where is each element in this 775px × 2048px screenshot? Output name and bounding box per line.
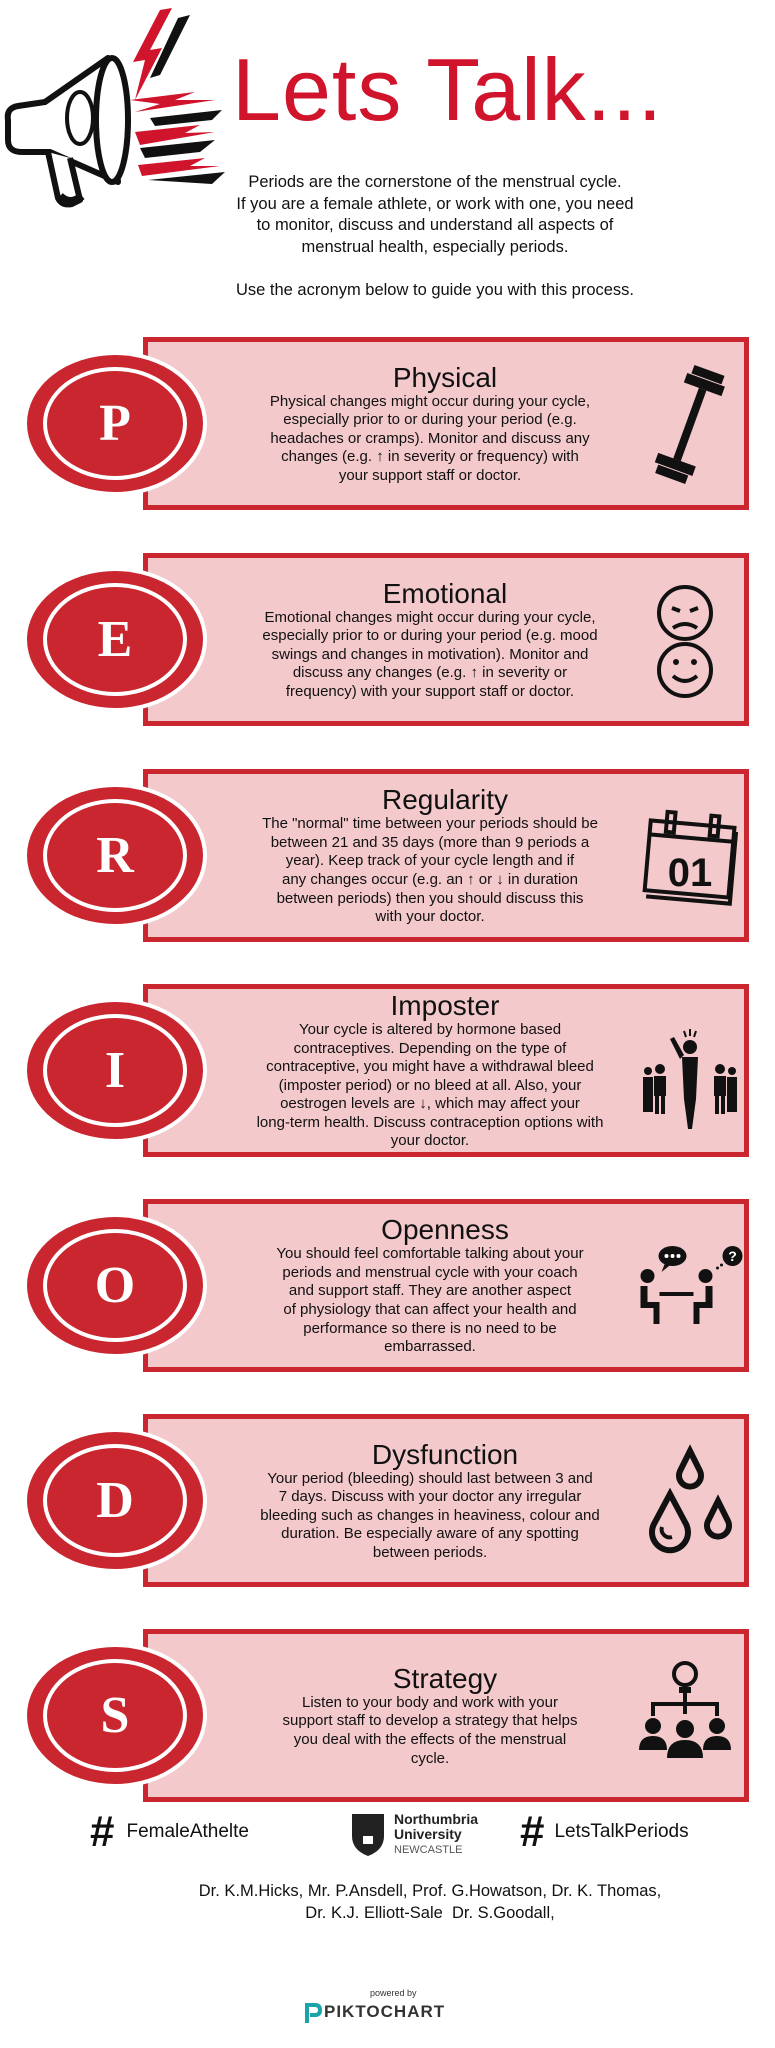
intro text: If you are a female athlete, or work with one, you need	[236, 194, 634, 212]
text: physical: especially prior to or during your period (e.g.	[283, 411, 577, 428]
text: physical: your support staff or doctor.	[339, 467, 521, 484]
text: strategy	[283, 1663, 577, 1767]
circle: E: E	[98, 611, 132, 668]
text: dysfunction	[260, 1439, 600, 1561]
intro text: Use the acronym below to guide you with this process.	[236, 280, 634, 298]
panel: Dysfunction	[27, 1414, 749, 1587]
text: openness: and support staff. They are another aspect	[289, 1282, 571, 1299]
text: openness: periods and menstrual cycle with your coach	[282, 1264, 578, 1281]
icon: megaphone	[4, 8, 225, 208]
logo: Northumbria University: Northumbria	[394, 1811, 478, 1827]
text: physical: changes (e.g. ↑ in severity or frequency) with	[281, 448, 579, 465]
text: dysfunction: between periods.	[373, 1544, 487, 1561]
text: openness: of physiology that can affect your health and	[283, 1301, 577, 1318]
circle: P: P	[99, 395, 131, 452]
text: strategy: support staff to develop a strategy that helps	[283, 1712, 577, 1729]
logo: Northumbria University: University	[394, 1826, 462, 1842]
text: regularity: The "normal" time between your periods should be	[262, 815, 598, 832]
text: physical: Physical changes might occur during your cycle,	[270, 393, 590, 410]
circle: I	[23, 998, 207, 1143]
text: regularity	[262, 784, 598, 925]
intro text: menstrual health, especially periods.	[302, 238, 568, 256]
circle: D: D	[96, 1472, 134, 1529]
icon: calendar: 01	[668, 851, 712, 895]
text: emotional: Emotional	[383, 578, 507, 609]
text: imposter: long-term health. Discuss contraception options with	[257, 1114, 603, 1131]
circle: E	[23, 567, 207, 712]
text: regularity: between 21 and 35 days (more than 9 periods a	[271, 834, 589, 851]
intro text: Periods are the cornerstone of the menstrual cycle.	[248, 173, 622, 191]
text: physical: Physical	[393, 362, 497, 393]
icon: lightbulb team	[639, 1661, 731, 1758]
megaphone body	[8, 58, 118, 182]
piktochart logo: PIKTOCHART	[324, 2002, 445, 2021]
icon: dumbbell	[654, 365, 725, 484]
text: emotional: discuss any changes (e.g. ↑ in severity or	[293, 664, 567, 681]
text: regularity: year). Keep track of your cycle length and if	[286, 852, 574, 869]
icon: calendar	[642, 810, 738, 906]
circle: R	[23, 783, 207, 928]
panel: Emotional	[27, 553, 749, 726]
bolts	[140, 15, 225, 184]
text: dysfunction: duration. Be especially aware of any spotting	[281, 1525, 579, 1542]
piktochart logo: powered by	[370, 1988, 417, 1998]
text: dysfunction: Dysfunction	[372, 1439, 518, 1470]
text: openness: performance so there is no need to be	[303, 1320, 557, 1337]
circle: D	[23, 1428, 207, 1573]
circle: R: R	[96, 827, 134, 884]
authors	[199, 1882, 661, 1922]
text: imposter: Imposter	[391, 990, 499, 1021]
text: emotional	[262, 578, 598, 700]
text: regularity: between periods) then you should discuss this	[277, 890, 583, 907]
icon: faces	[657, 585, 713, 698]
text: imposter: contraceptives. Depending on the type of	[294, 1040, 566, 1057]
text: dysfunction: 7 days. Discuss with your doctor any irregular	[279, 1488, 581, 1505]
text: openness: Openness	[381, 1214, 509, 1245]
logo: Northumbria University: NEWCASTLE	[394, 1844, 462, 1856]
piktochart logo	[305, 1988, 445, 2023]
icon: conversation	[640, 1246, 742, 1324]
circle: S: S	[101, 1687, 129, 1744]
panel: Openness	[27, 1199, 749, 1372]
text: regularity: any changes occur (e.g. an ↑ or ↓ in duration	[282, 871, 578, 888]
logo: Northumbria University	[352, 1811, 478, 1856]
panel: Regularity	[27, 769, 749, 942]
text: strategy: Listen to your body and work with your	[302, 1694, 558, 1711]
authors: Dr. K.J. Elliott-Sale Dr. S.Goodall,	[305, 1904, 555, 1922]
text: regularity: Regularity	[382, 784, 508, 815]
text: openness: embarrassed.	[384, 1338, 476, 1355]
hashtag: LetsTalkPeriods: # LetsTalkPeriods	[520, 1807, 689, 1856]
authors: Dr. K.M.Hicks, Mr. P.Ansdell, Prof. G.Howatson, Dr. K. Thomas,	[199, 1882, 661, 1900]
text: openness	[276, 1214, 584, 1355]
text: imposter: oestrogen levels are ↓, which may affect your	[280, 1095, 580, 1112]
text: dysfunction: Your period (bleeding) should last between 3 and	[267, 1470, 593, 1487]
text: strategy: Strategy	[393, 1663, 497, 1694]
text: imposter: Your cycle is altered by hormone based	[299, 1021, 561, 1038]
circle: O: O	[95, 1257, 135, 1314]
hashtag: FemaleAthelte: # FemaleAthelte	[90, 1807, 249, 1856]
panel: Strategy	[27, 1629, 749, 1802]
text: regularity: with your doctor.	[375, 908, 485, 925]
text: imposter: your doctor.	[391, 1132, 469, 1149]
text: imposter: contraceptive, you might have a withdrawal bleed	[266, 1058, 594, 1075]
icon: people standout	[643, 1029, 737, 1129]
intro text: to monitor, discuss and understand all aspects of	[257, 216, 613, 234]
text: dysfunction: bleeding such as changes in heaviness, colour and	[260, 1507, 600, 1524]
text: strategy: you deal with the effects of the menstrual	[294, 1731, 566, 1748]
text: emotional: frequency) with your support staff or doctor.	[286, 683, 574, 700]
circle: O	[23, 1213, 207, 1358]
intro text	[236, 173, 634, 298]
panel: Physical	[27, 337, 749, 510]
circle: I: I	[105, 1042, 125, 1099]
text: imposter: (imposter period) or no bleed at all. Also, your	[279, 1077, 581, 1094]
title: Lets Talk...	[232, 40, 663, 139]
panel: Imposter	[27, 984, 749, 1157]
text: openness: You should feel comfortable talking about your	[276, 1245, 584, 1262]
text: emotional: swings and changes in motivation). Monitor and	[272, 646, 588, 663]
text: emotional: especially prior to or during your period (e.g. mood	[262, 627, 598, 644]
text: strategy: cycle.	[411, 1750, 449, 1767]
icon: blood drops	[649, 1444, 732, 1554]
circle: P	[23, 351, 207, 496]
circle: S	[23, 1643, 207, 1788]
icon: conversation: ?	[728, 1248, 737, 1264]
text: physical: headaches or cramps). Monitor and discuss any	[270, 430, 590, 447]
text: imposter	[257, 990, 603, 1149]
text: emotional: Emotional changes might occur during your cycle,	[264, 609, 595, 626]
text: physical	[270, 362, 590, 484]
